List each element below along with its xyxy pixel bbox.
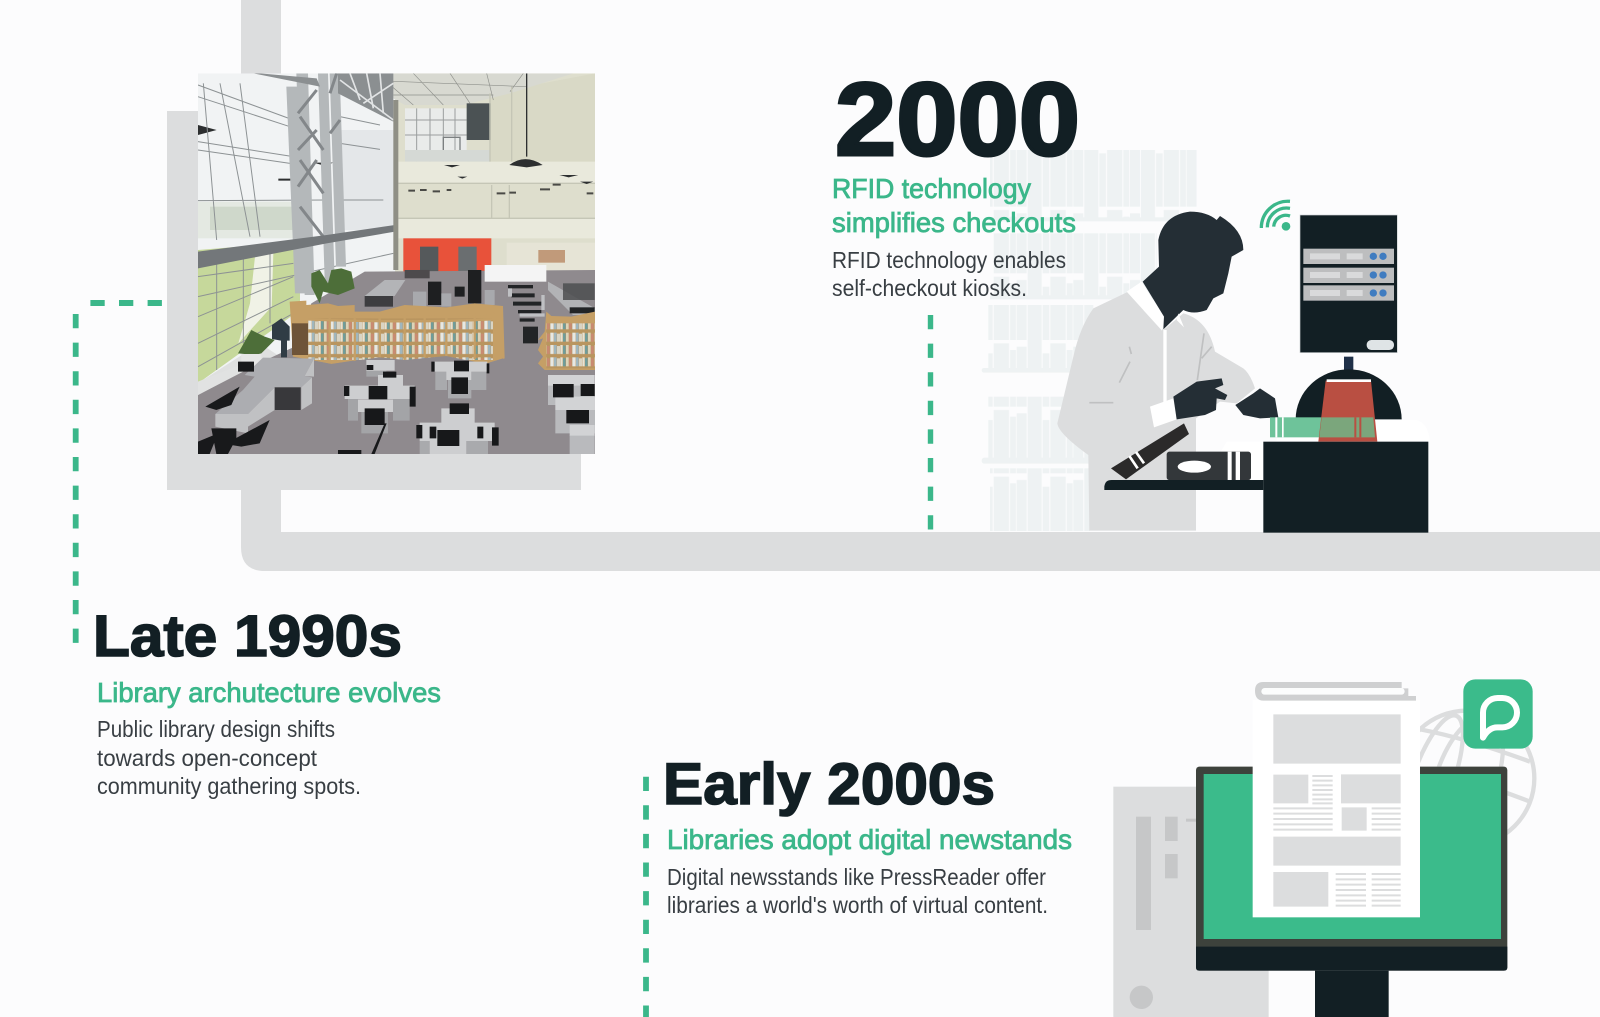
server: [1300, 215, 1397, 353]
photo plants: [238, 268, 355, 355]
photo backing block: [167, 111, 581, 490]
figure: wrinkles: [1089, 333, 1212, 403]
subheading: architecture: Library archutecture evolves: [97, 677, 441, 708]
figure: body: [1057, 292, 1255, 531]
newspaper: [1253, 682, 1420, 917]
shelf: [1104, 480, 1263, 490]
photo wall: [395, 73, 595, 273]
photo right bookcase: [538, 312, 595, 370]
body text: RFID: [832, 247, 1066, 301]
monitor: [1196, 767, 1507, 1017]
dashed connector: 2000: [928, 315, 933, 532]
icon: PressReader logo: [1463, 679, 1533, 749]
white counter backdrop: [1173, 420, 1430, 531]
body text: architecture: [97, 716, 361, 799]
photo right computers: [548, 282, 595, 315]
photo desk cluster B: [435, 370, 486, 398]
heading: Early 2000s: Early 2000s: [663, 752, 995, 817]
photo centre seating: [428, 270, 481, 305]
timeline track: [241, 0, 1600, 571]
illustration: librarian at RFID kiosk: [982, 150, 1430, 533]
photo beam: [198, 225, 395, 268]
photo desk cluster A: [348, 370, 410, 433]
figure: shirt details: [1160, 330, 1170, 420]
photo left chairs: [198, 362, 387, 454]
scanner dome: [1296, 357, 1402, 419]
photo truss: [253, 73, 393, 122]
book: tilted: [1111, 423, 1189, 479]
body text: architecture: Public library design shifts: [97, 716, 335, 742]
dashed connector: Late 1990s: [73, 300, 162, 643]
body text: architecture: community gathering spots.: [97, 773, 361, 799]
computer tower: [1113, 787, 1269, 1017]
heading: 2000: 2000: [835, 62, 1080, 178]
heading: Late 1990s: Late 1990s: [93, 604, 402, 669]
subheading: RFID: [832, 173, 1076, 238]
figure: collar: [1127, 282, 1184, 331]
subheading: RFID: simplifies checkouts: [832, 207, 1076, 238]
illustration: digital newsstand on monitor: [1113, 679, 1534, 1017]
green book under scanner: [1270, 417, 1373, 437]
photo L-shaped desk: [215, 358, 314, 414]
desk: [1263, 442, 1428, 533]
subheading: RFID: RFID technology: [832, 173, 1031, 204]
photo columns: [286, 73, 346, 295]
body text: RFID: RFID technology enables: [832, 247, 1066, 273]
photo floor and furniture: [198, 265, 595, 454]
figure: cuff: [1150, 398, 1177, 427]
photo main bookcase: [290, 301, 505, 364]
figure: right hand: [1173, 378, 1227, 419]
faint bookshelves: [982, 150, 1197, 531]
photo person: [272, 318, 290, 357]
photo: library interior: [198, 73, 595, 454]
globe: [1420, 708, 1536, 835]
body text: RFID: self-checkout kiosks.: [832, 275, 1027, 301]
dashed connector: Early 2000s: [643, 777, 649, 1017]
photo right desks: [548, 385, 595, 454]
photo glazing: frames: [198, 83, 393, 370]
book: flat: [1167, 452, 1251, 480]
body text: newsstands: Digital newsstands like PressReader offer: [667, 864, 1046, 890]
body text: newsstands: libraries a world's worth of virtual content.: [667, 892, 1048, 918]
photo back desks: [365, 280, 405, 296]
red scan beam: [1318, 379, 1377, 442]
body text: newsstands: [667, 864, 1048, 918]
figure: head and hair: [1143, 212, 1243, 329]
body text: architecture: towards open-concept: [97, 745, 318, 771]
photo glazing: landscape: [198, 242, 300, 383]
subheading: newsstands: Libraries adopt digital newstands: [667, 824, 1072, 855]
photo desk cluster C: [420, 441, 488, 454]
photo lights: [198, 73, 593, 184]
icon: wifi signal: [1261, 201, 1290, 231]
figure: left hand: [1235, 388, 1278, 418]
